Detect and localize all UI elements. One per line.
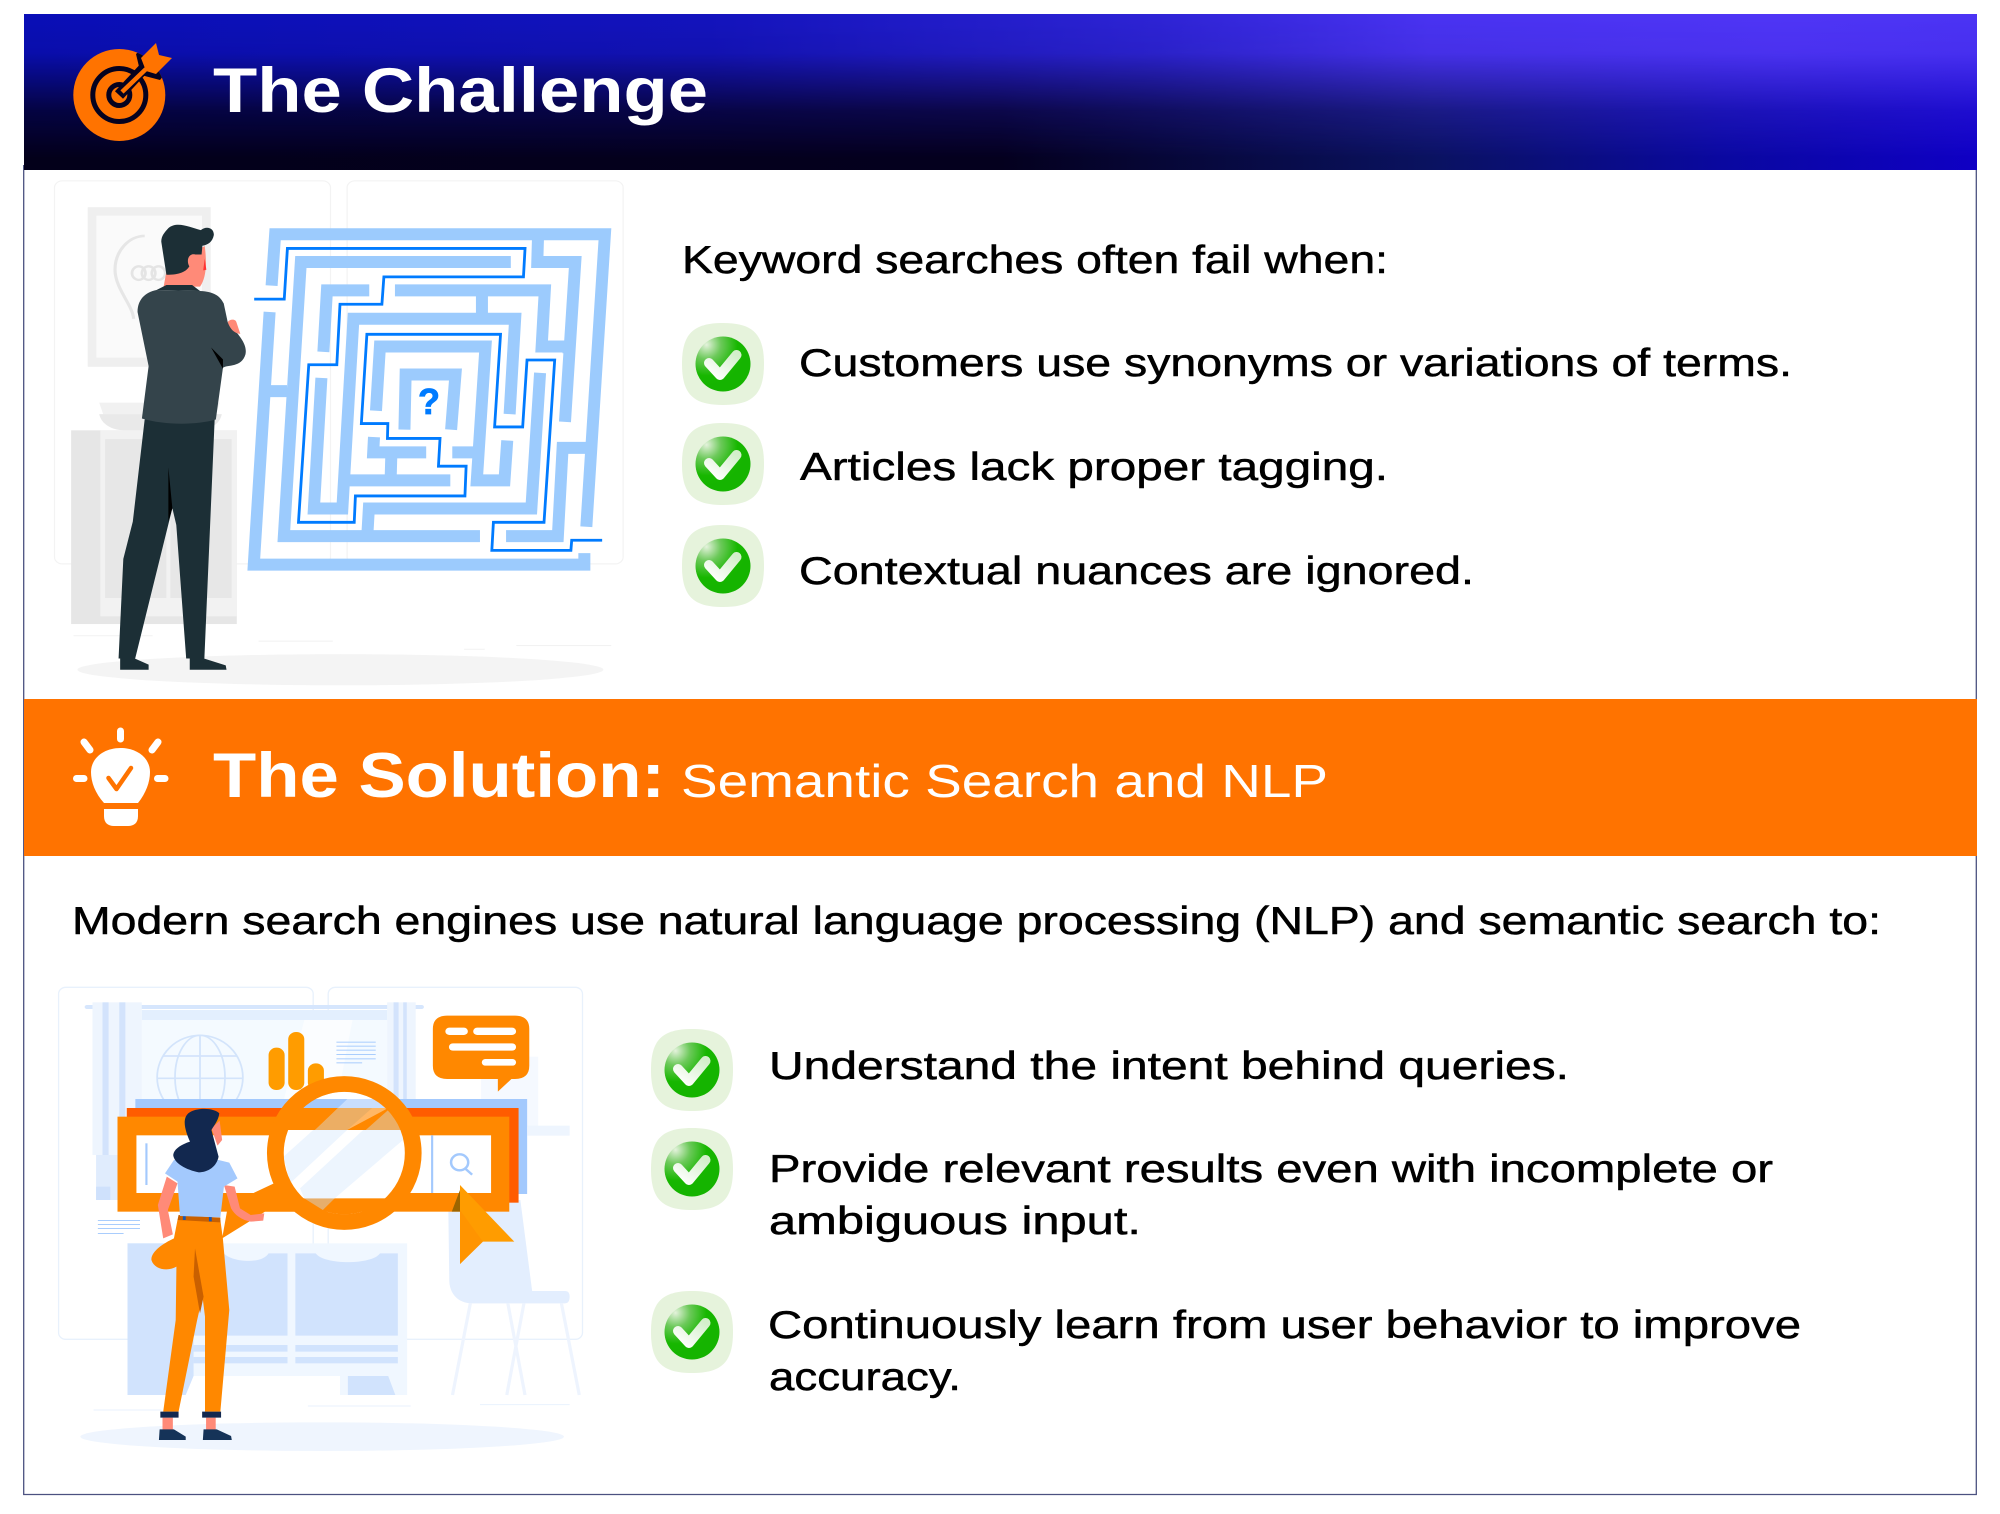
- maze walls: [254, 234, 605, 565]
- heading: The Solution: The Solution:: [213, 741, 665, 811]
- cabinet: [127, 1243, 407, 1405]
- woman figure: [151, 1109, 264, 1440]
- panel: solution header band: [24, 699, 1977, 856]
- orange bar chart: [269, 1032, 324, 1090]
- background: window frames: [59, 987, 582, 1339]
- background: globe icon: [156, 1034, 244, 1099]
- text: solution point 3: accuracy.: [769, 1356, 961, 1399]
- icon: light bulb with check: [76, 731, 165, 826]
- illustration: man studying a maze: [55, 181, 623, 685]
- cursor arrow: [452, 1185, 514, 1264]
- text: solution intro: Modern search engines use natural language processing (NLP) and semantic search to:: [72, 900, 1881, 943]
- magnifying glass: [222, 1084, 413, 1238]
- background: text lines: [98, 1042, 376, 1234]
- text: challenge intro: Keyword searches often fail when:: [682, 239, 1388, 282]
- text: solution point 2: [769, 1148, 1773, 1243]
- text: challenge point 1: Customers use synonyms or variations of terms.: [799, 342, 1792, 385]
- icon: green check 2: [682, 423, 764, 505]
- search bar: [117, 1099, 527, 1212]
- heading: The Challenge: The Challenge: [213, 56, 708, 126]
- icon: green check 5: [651, 1128, 733, 1210]
- floor shadow: [77, 654, 603, 685]
- chair and desk: [448, 1057, 579, 1395]
- panel: challenge header band: [24, 14, 1977, 170]
- background: framed bulb picture: [88, 207, 211, 367]
- icon: green check 1: [682, 323, 764, 405]
- background: cabinet with bowls: [71, 403, 611, 650]
- text: solution point 3: [768, 1304, 1801, 1399]
- text: solution point 2: ambiguous input.: [769, 1200, 1141, 1243]
- maze question mark: ?: [418, 381, 440, 422]
- illustration: woman with magnifier and search bar: [59, 987, 582, 1451]
- background: window with curtains: [85, 1002, 424, 1200]
- maze solution path: [254, 248, 602, 550]
- icon: green check 4: [651, 1029, 733, 1111]
- icon: green check 3: [682, 525, 764, 607]
- background: window frames: [55, 181, 623, 564]
- heading: Semantic Search and NLP: Semantic Search and NLP: [681, 755, 1328, 807]
- text: solution point 2: Provide relevant results even with incomplete or: [769, 1148, 1773, 1191]
- text: solution point 3: Continuously learn from user behavior to improve: [768, 1304, 1801, 1347]
- man figure: [119, 225, 246, 670]
- speech bubble: [433, 1016, 529, 1092]
- text: solution point 1: Understand the intent behind queries.: [769, 1045, 1569, 1088]
- floor shadow: [80, 1405, 570, 1451]
- icon: green check 6: [651, 1291, 733, 1373]
- text: challenge point 2: Articles lack proper tagging.: [800, 446, 1388, 489]
- icon: target with arrow: [73, 40, 178, 141]
- text: challenge point 3: Contextual nuances are ignored.: [799, 550, 1474, 593]
